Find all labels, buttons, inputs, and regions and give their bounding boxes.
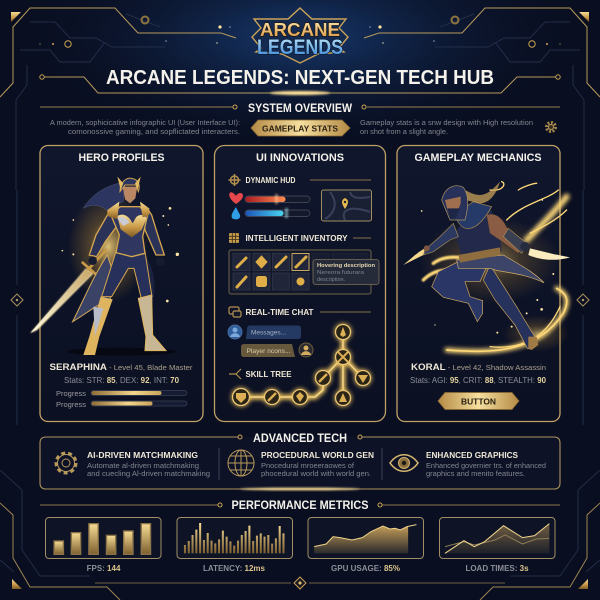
button — [438, 392, 519, 410]
icon: small gear — [546, 122, 556, 132]
overview text right — [360, 120, 533, 136]
button: BUTTON — [461, 396, 496, 406]
sub-section: intelligent inventory — [229, 233, 379, 294]
panel: UI innovations — [214, 146, 386, 422]
section heading: performance metrics: PERFORMANCE METRICS — [232, 500, 369, 512]
heading: advanced tech: ADVANCED TECH — [253, 433, 347, 445]
item: procedural world gen — [228, 450, 374, 478]
item: AI matchmaking — [56, 451, 210, 478]
hero stats: Stats: STR: 85, DEX: 92, INT: 70 — [64, 376, 180, 385]
bottom divider with diamond — [95, 577, 505, 589]
tooltip — [313, 260, 379, 284]
progress bars: Progress — [56, 400, 86, 409]
heading: UI innovations: UI INNOVATIONS — [256, 152, 344, 164]
tooltip: Nereora futurara — [317, 270, 365, 276]
button: gameplay stats: GAMEPLAY STATS — [262, 124, 338, 134]
chart: FPS — [46, 518, 161, 573]
hero name: KORAL - Level 42, Shadow Assassin — [411, 362, 546, 373]
section heading: system overview — [40, 101, 560, 115]
hero stats: Stats: AGI: 95, CRIT: 88, STEALTH: 90 — [410, 376, 547, 385]
sub-section: real-time chat — [228, 307, 371, 357]
panel: gameplay mechanics — [397, 146, 570, 422]
section heading: performance metrics — [40, 500, 560, 512]
item: AI matchmaking: Automate al-driven matchmaking — [87, 463, 199, 470]
item: enhanced graphics: Enhanced governier trs. of enhanced — [426, 463, 546, 470]
item: procedural world gen: Pnocedural mroeeraowes of — [261, 463, 354, 470]
overview text right: Gameplay stats is a snw design with High resolution — [360, 120, 533, 127]
section heading: system overview: SYSTEM OVERVIEW — [248, 101, 353, 115]
overview text right: on shot from a slight angle. — [360, 129, 448, 136]
sub-section: intelligent inventory: INTELLIGENT INVENTORY — [246, 233, 348, 243]
item: AI matchmaking: AI-DRIVEN MATCHMAKING — [87, 451, 198, 460]
heading: gameplay mechanics: GAMEPLAY MECHANICS — [414, 152, 542, 164]
item: procedural world gen: phocedural world with world gen. — [261, 471, 371, 478]
button: gameplay stats — [251, 120, 350, 136]
chart: latency — [177, 518, 292, 573]
illustration: Seraphina — [30, 177, 179, 356]
sub-section: real-time chat: Player ncons... — [246, 348, 291, 355]
tooltip: description. — [317, 277, 346, 283]
tooltip: Hovering description — [317, 263, 375, 269]
label: LOAD TIMES: 3s — [465, 564, 529, 573]
sub-section: real-time chat: Messages... — [251, 330, 286, 336]
illustration: Koral — [403, 182, 570, 352]
title: ARCANE LEGENDS: NEXT-GEN TECH HUB — [106, 67, 494, 89]
label: FPS: 144 — [87, 564, 121, 573]
overview text left: A modern, sophicicative infographic UI (User Interface UI): — [50, 120, 240, 127]
progress bars: Progress — [56, 389, 86, 398]
sub-section: dynamic HUD: DYNAMIC HUD — [246, 175, 296, 185]
chart: load times — [440, 518, 555, 573]
logo — [252, 8, 348, 63]
heading: hero profiles: HERO PROFILES — [78, 152, 164, 164]
sub-section: skill tree: SKILL TREE — [246, 369, 292, 379]
item: enhanced graphics: ENHANCED GRAPHICS — [426, 451, 519, 460]
overview text left — [50, 120, 240, 136]
minimap — [322, 190, 372, 221]
sub-section: skill tree — [229, 323, 372, 407]
sub-section: dynamic HUD — [228, 174, 372, 221]
item: AI matchmaking: and cuecling Al-driven matchmaking — [87, 471, 210, 478]
progress bars — [56, 389, 187, 409]
chart: GPU usage — [308, 518, 424, 573]
overview text left: comonossive gaming, and sopflictated interacters. — [68, 129, 240, 136]
logo: ARCANE — [260, 19, 340, 40]
title bracket line — [40, 75, 560, 95]
sub-section: real-time chat: REAL-TIME CHAT — [246, 307, 314, 317]
hero name: SERAPHINA - Level 45, Blade Master — [50, 362, 193, 373]
panel: advanced tech — [40, 433, 560, 490]
logo: LEGENDS — [257, 36, 343, 59]
label: GPU USAGE: 85% — [331, 564, 400, 573]
item: procedural world gen: PROCEDURAL WORLD GEN — [261, 451, 374, 460]
item: enhanced graphics — [390, 451, 546, 478]
panel: hero profiles — [30, 146, 203, 422]
label: LATENCY: 12ms — [203, 564, 266, 573]
item: enhanced graphics: graphics and menito features. — [426, 471, 525, 478]
